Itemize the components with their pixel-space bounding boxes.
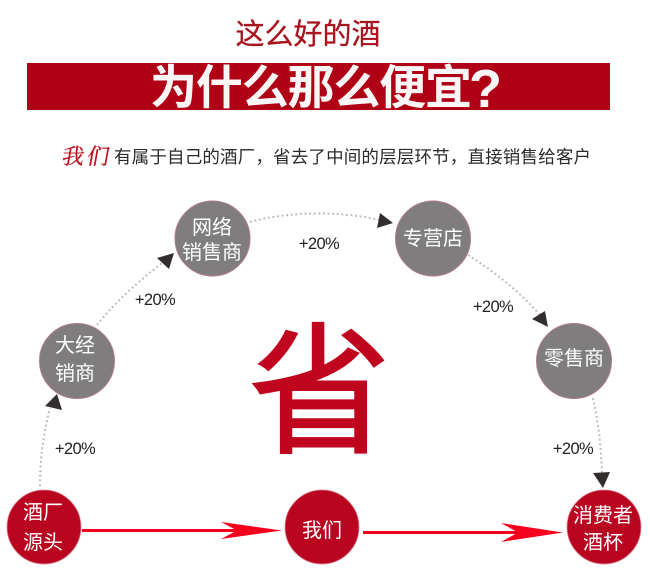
label: +20% step 1: +20% [55,440,96,458]
node: retailer: 零售商 [544,342,604,371]
arrow: specialty store to retailer [468,255,548,327]
node: online seller: 网络 [192,211,232,240]
banner: why so cheap: ? [469,59,502,119]
node: major distributor [40,324,114,398]
red arrow: us to consumer [363,523,563,542]
node: specialty store: 专营店 [403,222,463,251]
title: top line: 这么好的酒 [235,11,381,53]
node: winery source: 源头 [23,526,63,555]
label: +20% step 3: +20% [299,235,340,253]
banner: why so cheap: 为什么那么便宜 [150,49,472,118]
node: retailer [536,324,612,398]
node: consumer cup: 酒杯 [583,526,623,555]
node: specialty store [396,201,470,276]
node: us [285,490,359,564]
node: consumer cup [567,490,641,564]
label: +20% step 4: +20% [473,298,514,316]
node: major distributor: 销商 [55,357,95,386]
large character: save: 省 [248,277,390,483]
subtitle text block: 我们 [60,139,112,171]
arrow: online seller to specialty store [250,213,393,228]
node: online seller [175,201,250,276]
node: major distributor: 大经 [55,329,95,358]
subtitle text block: 有属于自己的酒厂，省去了中间的层层环节，直接销售给客户 [114,144,591,169]
arrow: source to distributor [40,394,62,486]
node: online seller: 销售商 [182,236,242,265]
arrow: distributor to online seller [97,253,174,325]
node: consumer cup: 消费者 [573,499,633,528]
node: us: 我们 [302,514,342,543]
arrow: retailer to consumer [593,398,610,488]
banner: why so cheap [27,49,610,119]
node: winery source: 酒厂 [23,496,63,525]
label: +20% step 2: +20% [135,291,176,309]
red arrow: source to us [82,522,282,539]
label: +20% step 5: +20% [553,440,594,458]
node: winery source [7,490,81,564]
